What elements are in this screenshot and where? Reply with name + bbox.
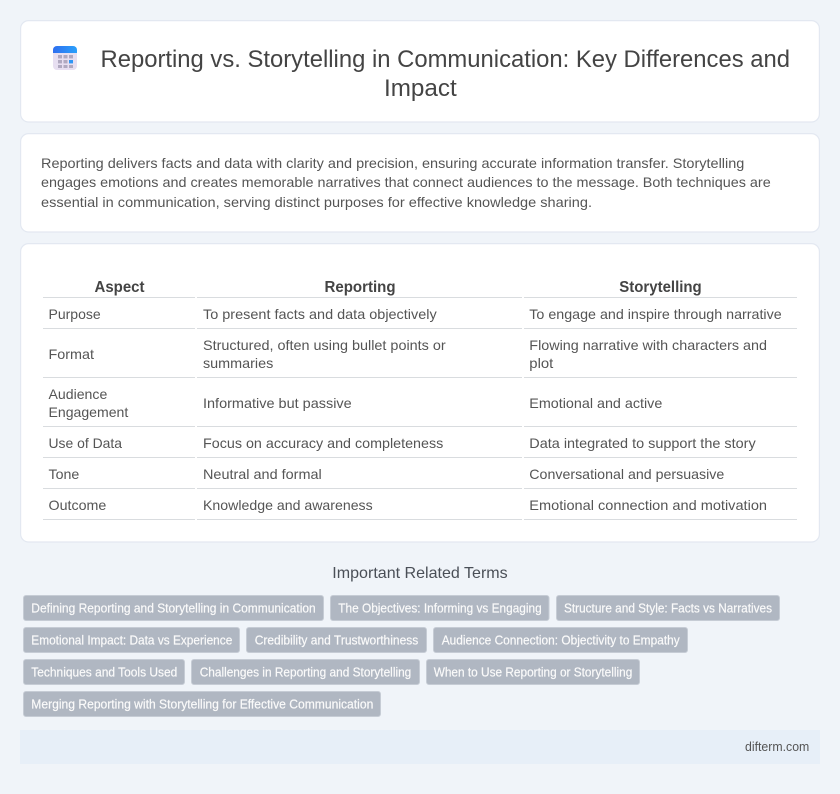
row: audience engagement: Emotional and active <box>529 395 663 411</box>
intro text: essential in communication, serving distinct purposes for effective knowledge sharing. <box>41 194 592 210</box>
row: outcome <box>48 497 767 513</box>
tag: Defining Reporting and Storytelling in Communication <box>31 601 316 615</box>
row: format: Flowing narrative with characters and <box>529 337 767 353</box>
row: format: summaries <box>203 355 273 371</box>
row: use of data: Data integrated to support the story <box>529 435 756 451</box>
row: audience engagement: Audience <box>48 386 108 402</box>
row: format <box>48 337 767 371</box>
intro text: engages emotions and creates memorable narratives that connect audiences to the message. Both techniques are <box>41 174 771 190</box>
footer <box>20 730 820 764</box>
table header <box>94 279 702 296</box>
tag: Structure and Style: Facts vs Narratives <box>564 601 772 615</box>
row: outcome: Emotional connection and motivation <box>529 497 767 513</box>
row: purpose: Purpose <box>48 306 101 322</box>
tag: Audience Connection: Objectivity to Empathy <box>442 633 680 647</box>
row: format: Structured, often using bullet points or <box>203 337 446 353</box>
tag: Challenges in Reporting and Storytelling <box>200 665 411 679</box>
table header: Storytelling <box>619 279 702 296</box>
tag <box>330 596 549 620</box>
row: audience engagement: Informative but passive <box>203 395 352 411</box>
row: use of data: Focus on accuracy and completeness <box>203 435 443 451</box>
row: purpose: To present facts and data objectively <box>203 306 437 322</box>
row: format: plot <box>529 355 553 371</box>
tag <box>426 660 640 684</box>
table header: Reporting <box>324 279 396 296</box>
row: tone <box>48 466 725 482</box>
intro text: Reporting delivers facts and data with clarity and precision, ensuring accurate information transfer. Storytelling <box>41 155 744 171</box>
tag: Techniques and Tools Used <box>31 665 177 679</box>
title: Reporting vs. Storytelling in Communication: Key Differences and <box>100 46 790 73</box>
title: Impact <box>384 75 457 102</box>
tag <box>434 628 688 652</box>
tag <box>556 596 780 620</box>
related term tags <box>24 596 780 716</box>
tag: When to Use Reporting or Storytelling <box>434 665 632 679</box>
title <box>100 46 790 102</box>
row: use of data <box>48 435 756 451</box>
tag: Emotional Impact: Data vs Experience <box>31 633 232 647</box>
icon: calendar <box>53 46 77 70</box>
row: tone: Conversational and persuasive <box>529 466 725 482</box>
intro text <box>41 155 771 210</box>
tag <box>24 692 380 716</box>
row: tone: Neutral and formal <box>203 466 322 482</box>
tag: Credibility and Trustworthiness <box>255 633 418 647</box>
footer: difterm.com <box>745 739 809 754</box>
tag <box>24 660 184 684</box>
panel: title card <box>21 21 819 122</box>
tag <box>24 628 240 652</box>
row: use of data: Use of Data <box>48 435 122 451</box>
row: outcome: Outcome <box>48 497 107 513</box>
tag: The Objectives: Informing vs Engaging <box>338 601 542 615</box>
row: purpose: To engage and inspire through narrative <box>529 306 782 322</box>
tag <box>246 628 426 652</box>
row: audience engagement <box>48 386 663 420</box>
row: audience engagement: Engagement <box>48 404 128 420</box>
tag <box>24 596 324 620</box>
row: format: Format <box>48 346 94 362</box>
heading: related terms: Important Related Terms <box>332 565 508 582</box>
table header: Aspect <box>94 279 145 296</box>
tag: Merging Reporting with Storytelling for Effective Communication <box>31 697 373 711</box>
row: purpose <box>48 306 782 322</box>
row: tone: Tone <box>48 466 80 482</box>
panel: comparison table <box>21 244 819 542</box>
tag <box>192 660 420 684</box>
row: outcome: Knowledge and awareness <box>203 497 373 513</box>
panel: introduction <box>21 134 819 232</box>
